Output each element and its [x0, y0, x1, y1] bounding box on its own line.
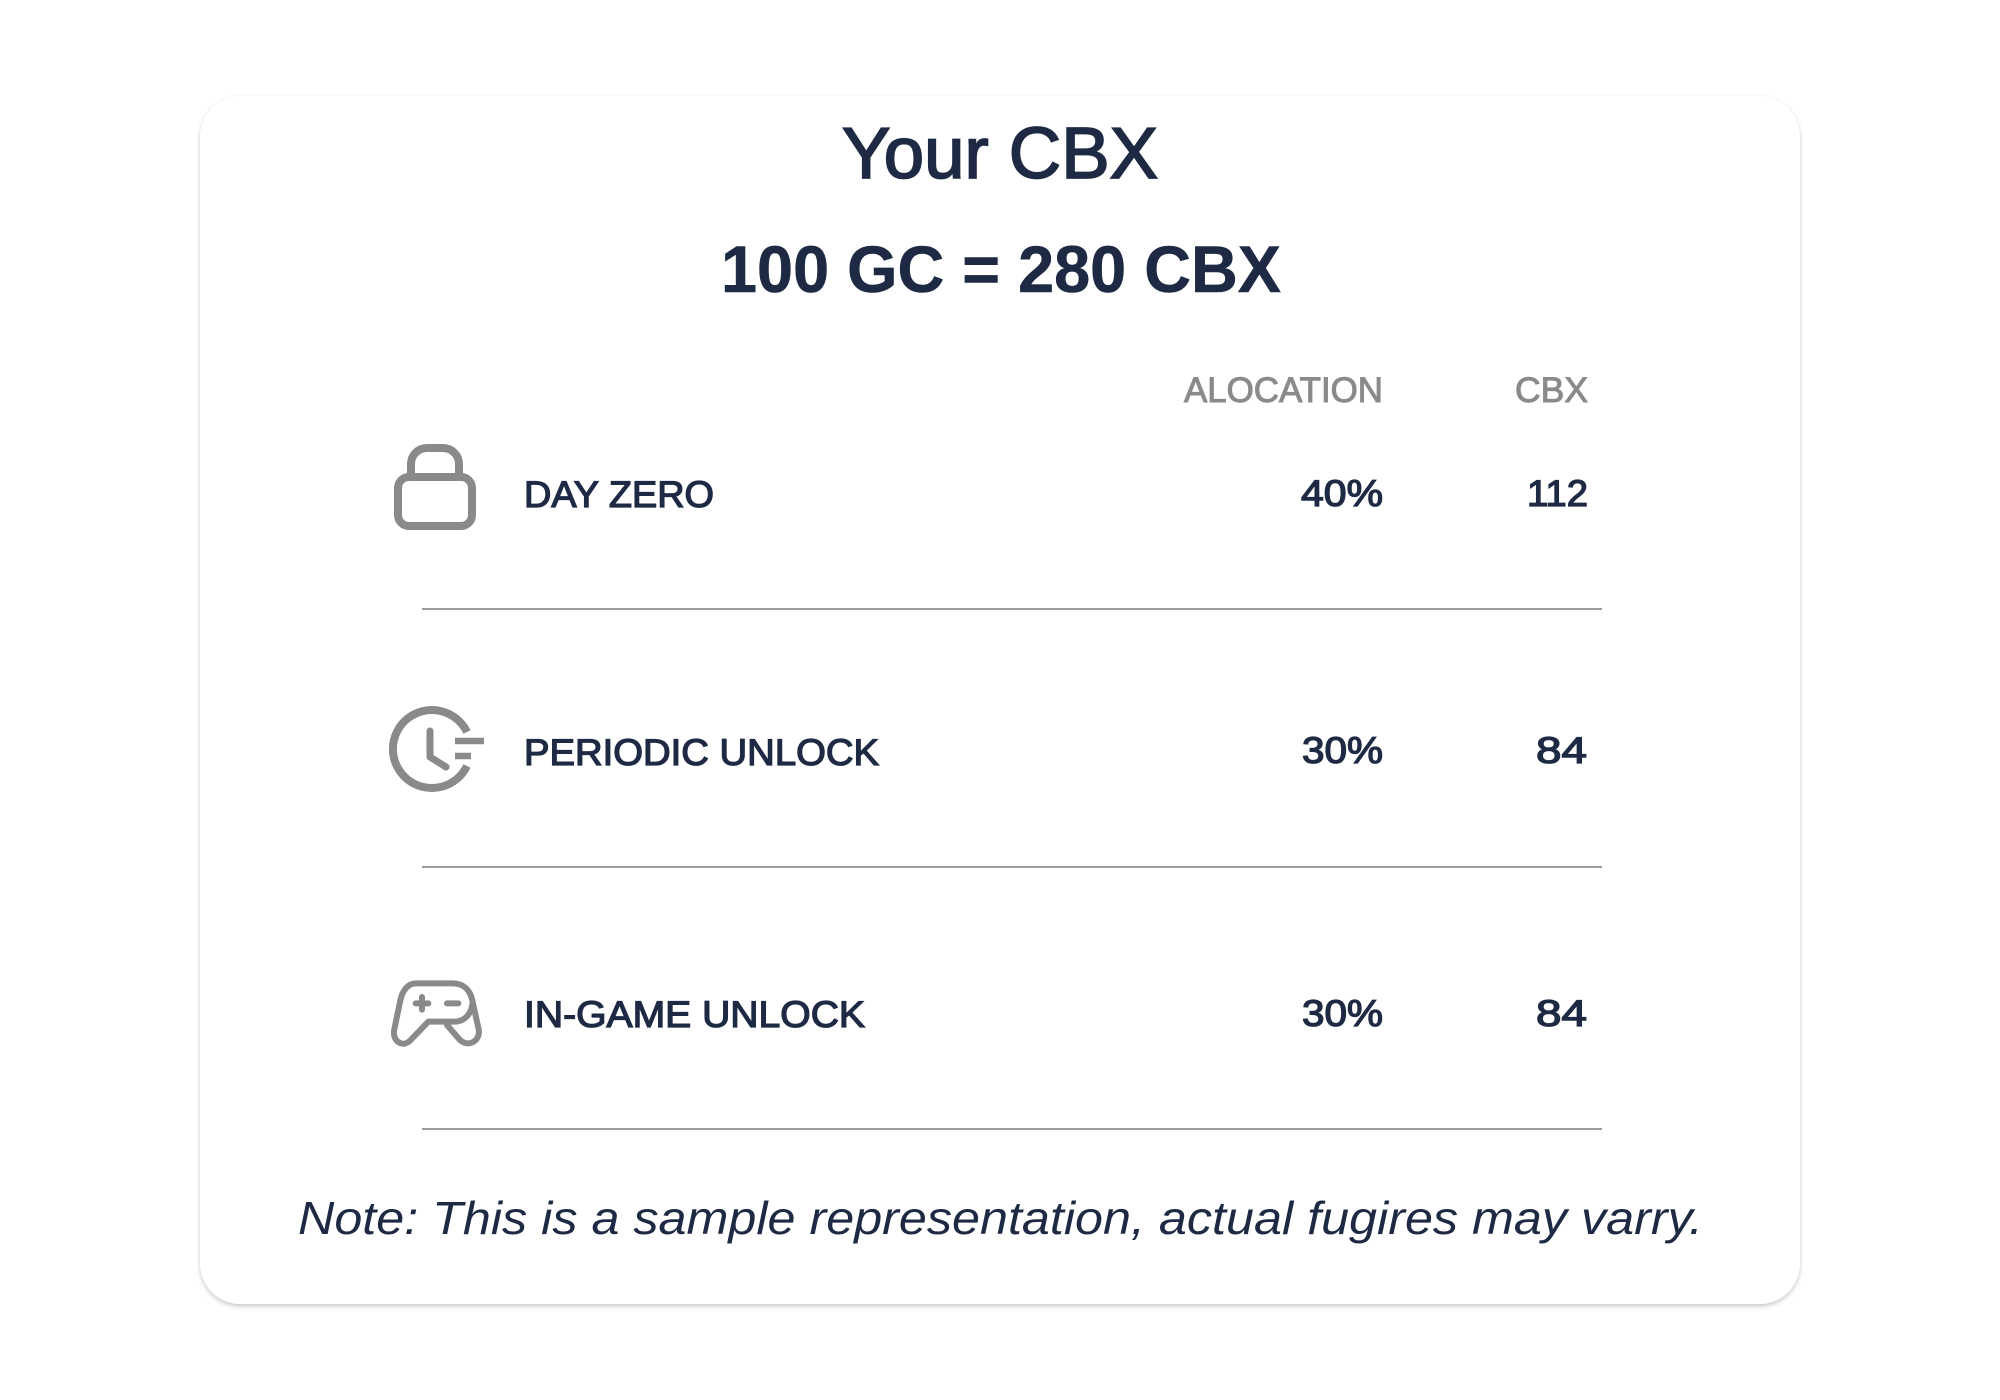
- icon: game controller: [394, 983, 479, 1044]
- row label: day zero: DAY ZERO: [524, 474, 714, 515]
- icon: clock: [393, 710, 484, 788]
- title: Your CBX: [842, 114, 1158, 194]
- row value: periodic CBX: 84: [1536, 730, 1587, 771]
- row label: periodic unlock: PERIODIC UNLOCK: [524, 732, 879, 773]
- row value: periodic allocation: 30%: [1302, 730, 1383, 771]
- row value: day zero allocation: 40%: [1301, 473, 1383, 514]
- row value: in-game allocation: 30%: [1302, 993, 1383, 1034]
- row value: in-game CBX: 84: [1536, 993, 1587, 1034]
- column header: CBX: CBX: [1515, 371, 1588, 410]
- icon: padlock: [398, 448, 472, 526]
- conversion rate heading: 100 GC = 280 CBX: [721, 232, 1281, 306]
- panel: card: [200, 96, 1800, 1304]
- row value: day zero CBX: 112: [1527, 473, 1588, 514]
- column header: allocation: ALOCATION: [1184, 371, 1383, 410]
- footnote: Note: This is a sample representation, actual fugires may varry.: [298, 1192, 1703, 1244]
- row label: in-game unlock: IN-GAME UNLOCK: [524, 994, 865, 1035]
